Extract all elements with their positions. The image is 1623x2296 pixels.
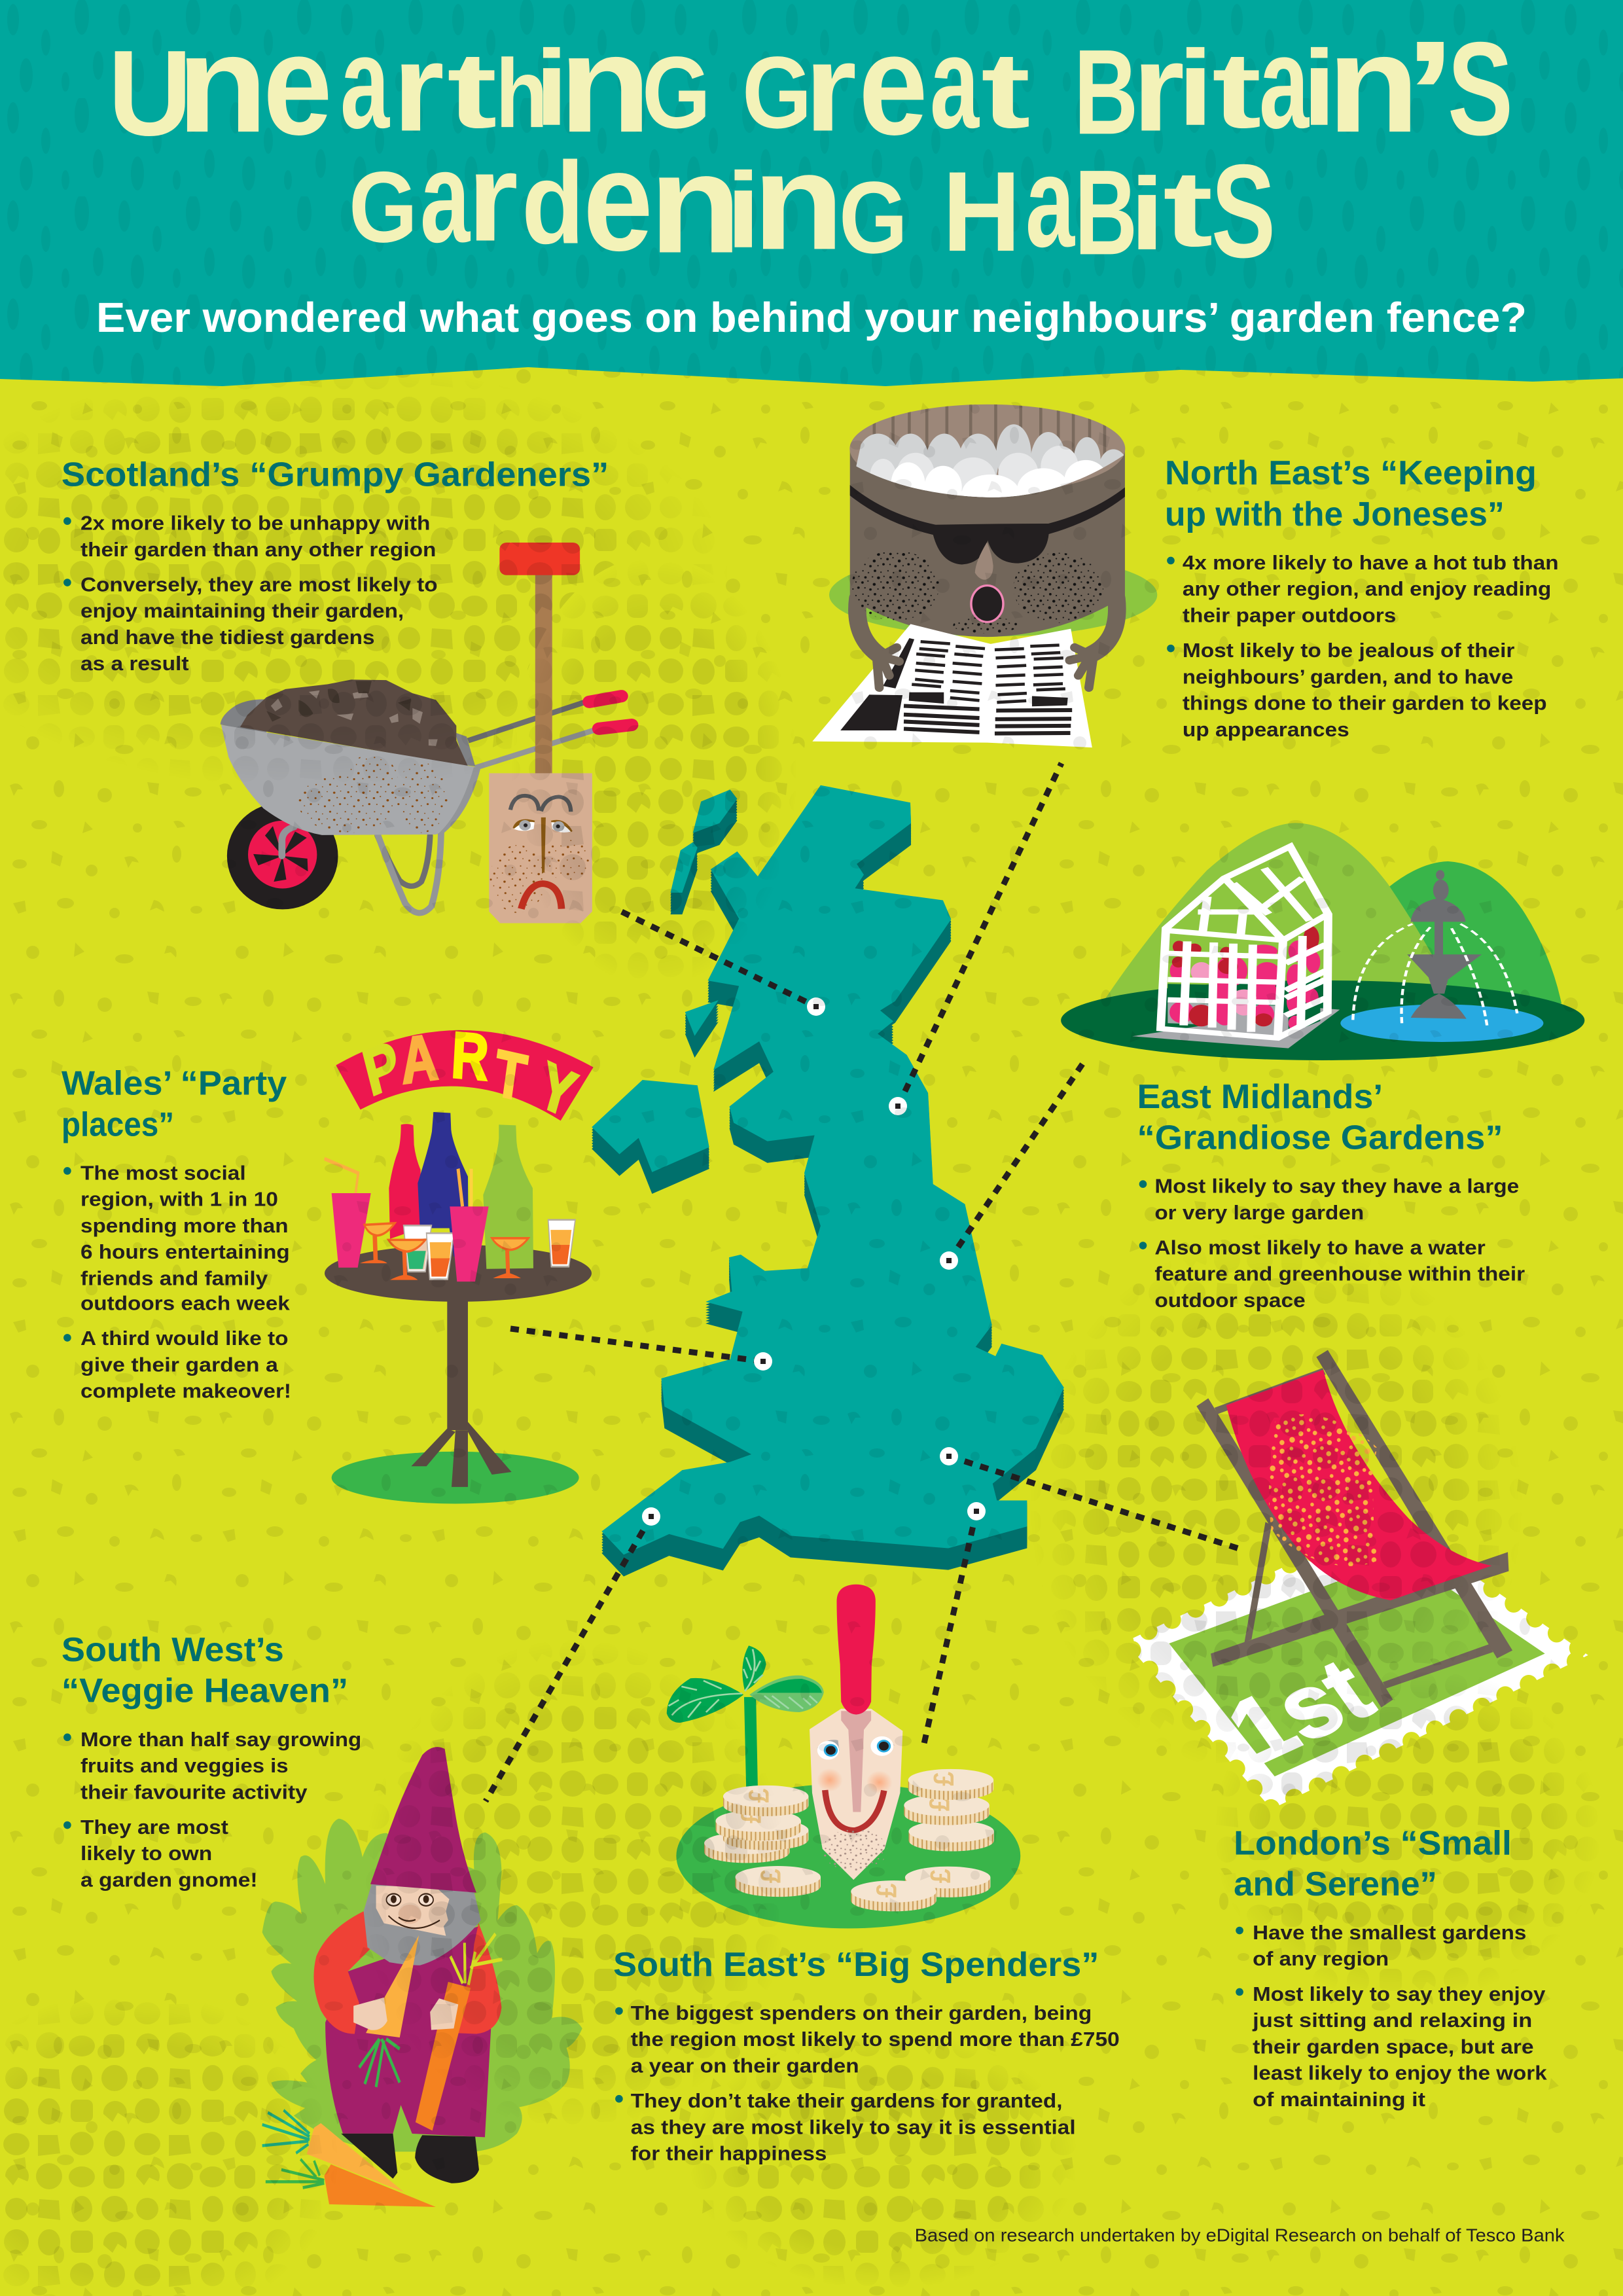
title: t [1212,30,1261,151]
trowel [810,1585,902,1880]
body: North East: up appearances [1183,718,1349,741]
illustration: smiling trowel and coins (South East) [667,1585,1020,1928]
greenhouse frame [1160,846,1328,1038]
body: South East: the region most likely to spend more than £750 [631,2028,1120,2051]
title: i [725,151,760,271]
body: London: their garden space, but are [1253,2035,1534,2058]
panel: Wales [62,1065,291,1403]
heading: South West: South West’s [62,1631,284,1669]
body: East Midlands: or very large garden [1154,1201,1364,1224]
coins right stack: £ [927,1772,959,1786]
bottles [389,1112,533,1269]
title: S [1211,137,1275,286]
body: South East: They don’t take their gardens for granted, [631,2089,1062,2112]
heading: South West: “Veggie Heaven” [62,1672,348,1710]
title: i [1130,157,1164,272]
title: a [1026,130,1075,275]
text layer in overview units [62,454,1565,2246]
party banner: T [490,1036,531,1115]
title: r [804,18,857,158]
body: South East: The biggest spenders on their garden, being [631,2001,1092,2024]
flowers [1169,941,1320,1031]
title: r [467,128,518,268]
tray [221,725,475,835]
map markers [642,997,986,1526]
body: East Midlands: outdoor space [1154,1289,1306,1312]
body: London: least likely to enjoy the work [1253,2062,1548,2085]
heading: North East: up with the Joneses” [1165,495,1505,533]
gnome body [325,1926,491,2137]
stubble [851,550,939,620]
hands [877,647,1094,688]
title: n [753,126,844,279]
sleeves [313,1911,501,2034]
tub body [850,449,1125,637]
drinks [325,1158,575,1282]
body: Scotland: Conversely, they are most likely to [80,573,438,596]
panel: London [1234,1824,1548,2111]
heading: Wales: places” [62,1105,174,1143]
seedling [667,1645,824,1787]
title: a [420,126,470,270]
map: Great Britain and Ireland [592,785,1064,1577]
body: South West: a garden gnome! [80,1868,258,1891]
hills [1105,823,1561,1003]
body: London: Have the smallest gardens [1253,1921,1526,1944]
body: Wales: complete makeover! [80,1380,291,1403]
coins left stack: £ [735,1809,767,1823]
sunglasses [850,485,1125,564]
chair frame [1196,1350,1512,1708]
title: e [263,5,332,166]
body: Scotland: as a result [80,652,188,675]
title: G [349,151,418,264]
lawn [332,1452,579,1503]
coins right stack: £ [923,1797,955,1811]
body: East Midlands: Also most likely to have a water [1154,1236,1486,1259]
body: East Midlands: Most likely to say they have a large [1154,1175,1519,1198]
panel: East Midlands [1137,1078,1525,1312]
body: East Midlands [1139,1175,1525,1312]
coins on lawn [736,1866,990,1911]
coins left stack: £ [743,1789,775,1803]
body: South West: They are most [80,1816,228,1839]
coins right stack [904,1769,994,1852]
body: Scotland: 2x more likely to be unhappy with [80,512,430,535]
trowel eyes [817,1736,895,1760]
panel: North East [1165,454,1559,741]
carrots on the ground [262,2110,436,2207]
title: a [340,10,389,156]
party banner: Y [532,1048,583,1131]
heading: East Midlands: “Grandiose Gardens” [1137,1119,1503,1157]
heading: London [1234,1824,1512,1903]
coins on lawn: £ [870,1884,902,1897]
heading: East Midlands: East Midlands’ [1137,1078,1383,1116]
body: South West: their favourite activity [80,1780,308,1803]
body: Wales: region, with 1 in 10 [80,1188,278,1211]
title: S [1448,15,1513,164]
panel: South West [62,1631,361,1891]
hat [370,1747,476,1893]
header band [0,0,1623,386]
illustration: hot tub character reading a newspaper (North East) [812,404,1157,747]
connector: dotted lines from regions to map [486,763,1241,1801]
body: North East: any other region, and enjoy reading [1183,577,1551,600]
coins left stack [704,1785,808,1863]
heading: Wales [62,1065,287,1143]
body: South East [615,2001,1120,2165]
body: Scotland: and have the tidiest gardens [80,626,374,649]
illustration: garden gnome with carrots (South West) [262,1747,582,2207]
body: Wales: A third would like to [80,1327,289,1350]
stamp value: 1st [1209,1640,1391,1782]
water bubbles [856,424,1124,497]
title: e [859,5,928,166]
body: London: Most likely to say they enjoy [1253,1982,1545,2005]
body: South East: a year on their garden [631,2054,859,2077]
heading: East Midlands [1137,1078,1503,1157]
body: Scotland: their garden than any other region [80,538,436,561]
body: North East: neighbours’ garden, and to have [1183,665,1513,688]
party banner: R [450,1018,490,1094]
newspaper [812,624,1092,747]
body: Scotland [63,512,438,675]
body: Scotland: enjoy maintaining their garden, [80,600,404,622]
title: t [981,30,1030,151]
title: i [1302,28,1336,149]
title: G [839,161,908,275]
title: t [446,30,497,151]
title: U [107,25,192,162]
title: B [1073,25,1138,160]
title: n [177,7,268,162]
body: London: of maintaining it [1253,2088,1425,2111]
heading: London: London’s “Small [1234,1824,1512,1862]
pond [1340,1005,1543,1042]
body: Wales: outdoors each week [80,1291,291,1314]
title: n [1327,7,1419,162]
body: Wales: spending more than [80,1214,289,1237]
illustration: greenhouse and fountain (East Midlands) [1061,823,1584,1060]
fountain [1353,870,1517,1026]
illustration: party table with drinks (Wales) [325,1018,594,1503]
title: i [535,28,569,149]
illustration: deckchair on first class stamp (London) [1125,1350,1588,1809]
body: North East: 4x more likely to have a hot tub than [1183,551,1559,574]
dirt speckles [298,773,398,833]
body: South West: fruits and veggies is [80,1754,289,1777]
body: South West [63,1728,361,1891]
body: London: just sitting and relaxing in [1252,2009,1532,2032]
body: London: of any region [1253,1947,1389,1970]
body: North East: Most likely to be jealous of their [1183,639,1514,662]
title: t [1162,149,1213,270]
heading: North East [1165,454,1537,533]
coins on lawn: £ [924,1869,957,1883]
arms [857,598,1117,657]
coins on lawn: £ [755,1869,787,1883]
title: e [583,120,653,281]
body: North East [1167,551,1559,741]
title: G [742,36,812,150]
table [325,1245,592,1487]
title: B [1075,145,1137,281]
body: East Midlands: feature and greenhouse within their [1154,1263,1525,1285]
boots [341,2134,479,2183]
illustration: wheelbarrow and grumpy spade (Scotland) [221,543,632,924]
greenhouse [1132,846,1340,1049]
title [107,5,1513,286]
wheel [227,802,338,909]
body: North East: their paper outdoors [1183,603,1396,626]
title: G [642,36,711,150]
title: i [1177,28,1214,149]
title: h [495,39,548,149]
body: London [1236,1921,1548,2111]
mouth [971,586,1003,622]
body: Wales [63,1161,291,1403]
title: ’ [1404,10,1457,179]
lawn [1061,980,1584,1060]
body: North East: things done to their garden to keep [1183,692,1547,715]
body: Wales: 6 hours entertaining [80,1240,290,1263]
beard [364,1884,481,1965]
party banner: A [398,1020,440,1098]
face [376,1886,450,1936]
stamp [1125,1517,1588,1809]
title: H [942,148,1021,276]
carrots held [353,1934,502,2130]
heading: Wales: Wales’ “Party [62,1065,287,1103]
party banner: P [357,1027,406,1109]
heading: South West [62,1631,348,1710]
body: South West: likely to own [80,1842,212,1865]
tub rim [849,404,1125,493]
spade grumpy face [490,796,591,913]
title: n [559,7,651,162]
title: d [522,139,584,269]
body: Wales: give their garden a [80,1353,279,1376]
chair fabric [1215,1370,1491,1600]
body: Wales: The most social [80,1161,246,1184]
title: r [1132,18,1185,158]
title: a [1259,10,1309,156]
body: South East: for their happiness [631,2142,827,2165]
title: r [393,18,444,158]
body: South West: More than half say growing [80,1728,361,1751]
party banner [336,1018,594,1131]
heading: London: and Serene” [1234,1865,1437,1903]
subtitle: Ever wondered what goes on behind your neighbours’ garden fence? [96,294,1527,341]
footer credit: Based on research undertaken by eDigital Research on behalf of Tesco Bank [915,2225,1565,2246]
spade [489,543,592,924]
title: n [649,125,741,283]
barrow legs [378,830,441,913]
soil [240,679,468,766]
barrow handles and grips [468,696,632,768]
panel: South East [613,1946,1120,2165]
trowel smile [825,1790,884,1830]
body: South East: as they are most likely to say it is essential [631,2115,1076,2138]
title: a [930,10,979,156]
panel: Scotland [62,456,609,675]
heading: Scotland: Scotland’s “Grumpy Gardeners” [62,456,609,493]
bush [262,1819,582,2151]
body: Wales: friends and family [80,1266,268,1289]
heading: South East: South East’s “Big Spenders” [613,1946,1099,1984]
heading: North East: North East’s “Keeping [1165,454,1537,492]
